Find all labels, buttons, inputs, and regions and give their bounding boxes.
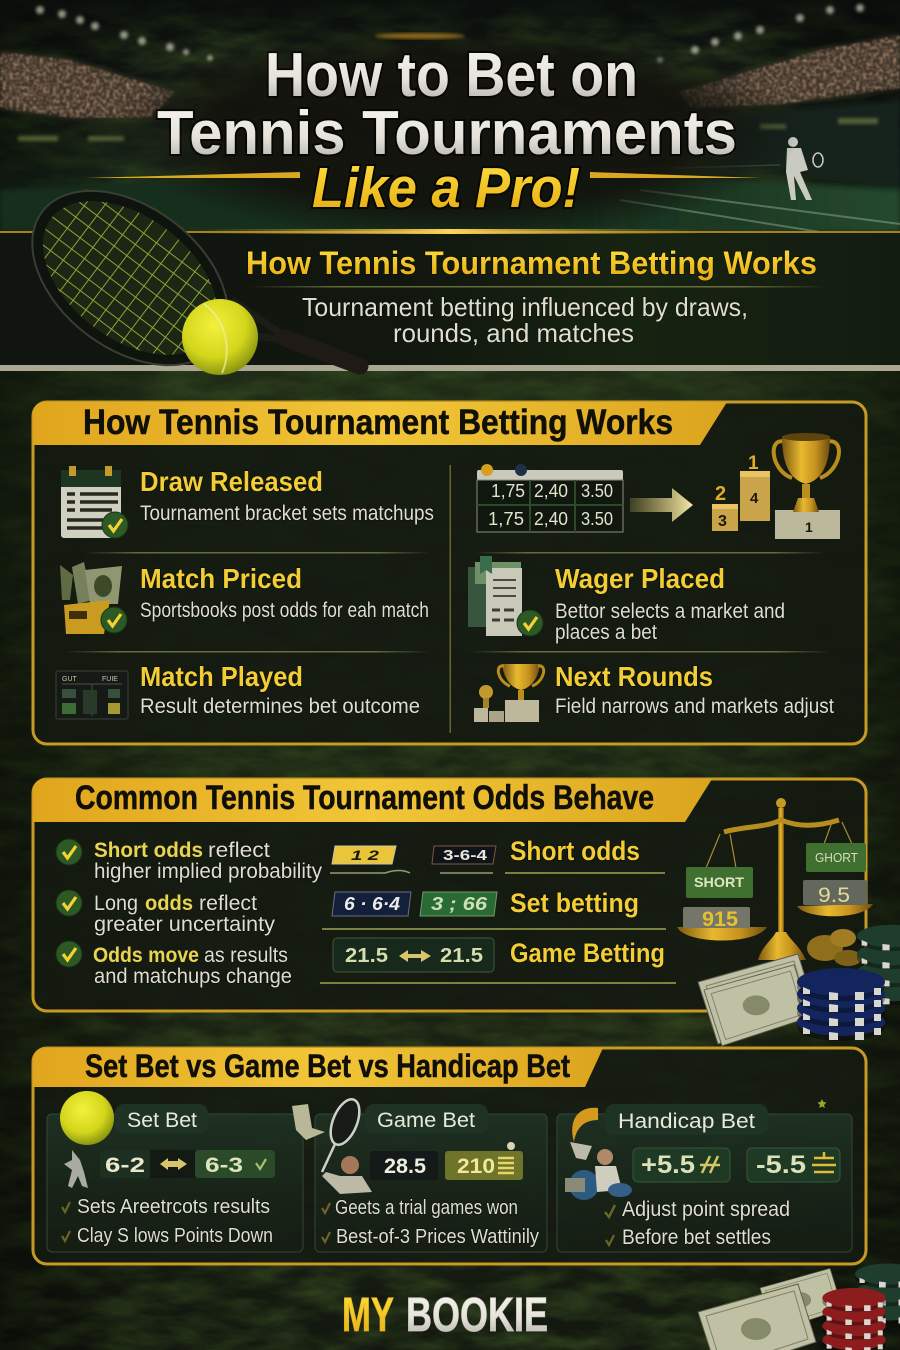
title: Like a Pro! <box>312 156 580 220</box>
panel: how betting works <box>33 402 866 744</box>
odds row: 210 <box>457 1155 495 1178</box>
title <box>157 41 737 220</box>
podium and trophy: 3 <box>718 513 727 530</box>
row: set betting: Set betting <box>510 888 639 918</box>
step: draw released: Draw Released <box>140 466 323 497</box>
icon: cash box <box>60 562 127 634</box>
step: wager placed: places a bet <box>555 621 657 644</box>
pill: handicap bet: Handicap Bet <box>618 1110 755 1133</box>
panel: bet comparison <box>33 1048 866 1264</box>
bullets <box>605 1198 790 1249</box>
logo: MY <box>342 1289 394 1342</box>
intro text: rounds, and matches <box>393 318 634 348</box>
point: long odds: Long <box>94 892 138 915</box>
pill: game bet: Game Bet <box>377 1109 475 1132</box>
intro heading: How Tennis Tournament Betting Works <box>246 245 817 281</box>
point: long odds <box>56 890 276 936</box>
odds table: 3.50 <box>581 509 613 529</box>
icon: betting slip <box>468 556 543 636</box>
step: match priced: Match Priced <box>140 563 302 594</box>
icon: balance scale: SHORT <box>694 874 744 890</box>
score row: 6-3 <box>205 1154 243 1177</box>
odds table <box>477 464 623 532</box>
point: short odds: reflect <box>208 839 270 862</box>
spread chips: -5.5 <box>756 1151 806 1179</box>
bullets <box>62 1196 273 1247</box>
point: odds move: and matchups change <box>94 965 292 988</box>
section heading: Set Bet vs Game Bet vs Handicap Bet <box>85 1048 570 1084</box>
icon: balance scale <box>677 798 873 966</box>
odds table: 2,40 <box>534 481 568 501</box>
bullets: Before bet settles <box>622 1226 771 1249</box>
point: long odds: reflect <box>199 892 257 915</box>
pill: handicap bet <box>605 1104 768 1135</box>
odds row <box>370 1142 523 1180</box>
step: wager placed: Bettor selects a market and <box>555 600 785 623</box>
step: wager placed: Wager Placed <box>555 563 725 594</box>
intro text: Tournament betting influenced by draws, <box>302 292 748 322</box>
podium and trophy: 1 <box>748 453 759 474</box>
point: odds move: as results <box>204 944 288 967</box>
icon: player figure <box>64 1150 88 1188</box>
spread chips <box>633 1148 840 1182</box>
distant player <box>786 137 823 200</box>
section heading: Common Tennis Tournament Odds Behave <box>75 779 654 817</box>
bullets: Adjust point spread <box>622 1198 790 1221</box>
row: short odds <box>330 836 665 874</box>
icon: cash and poker chips <box>698 925 900 1046</box>
icon: tennis ball <box>60 1091 114 1145</box>
row: set betting: 6 · 6·4 <box>344 894 400 914</box>
icon: bottom cash and chips <box>698 1264 900 1350</box>
section banner <box>33 779 712 822</box>
odds table: 3.50 <box>581 481 613 501</box>
icon: tennis ball <box>182 299 258 375</box>
spread chips: +5.5 <box>641 1151 695 1179</box>
odds table: 2,40 <box>534 509 568 529</box>
step: match played: Result determines bet outcome <box>140 695 420 718</box>
pill: game bet <box>365 1104 488 1134</box>
step: match priced <box>60 562 429 634</box>
pill: set bet <box>115 1104 208 1134</box>
left crowd <box>0 52 175 118</box>
icon: bracket calendar <box>61 466 128 538</box>
arrow <box>630 488 693 522</box>
title flourishes <box>85 172 762 178</box>
logo <box>342 1289 548 1342</box>
row: short odds: 3-6-4 <box>443 847 488 864</box>
point: short odds: higher implied probability <box>94 860 322 883</box>
row: game betting <box>320 938 676 984</box>
row: short odds: Short odds <box>510 836 640 866</box>
icon: star <box>818 1099 826 1108</box>
top gold glow <box>375 33 465 39</box>
right wall <box>730 100 900 192</box>
step: match priced: Sportsbooks post odds for eah match <box>140 599 429 622</box>
bullets: Geets a trial games won <box>335 1197 518 1219</box>
column divider <box>450 465 451 733</box>
step: draw released <box>61 466 434 538</box>
row: game betting: Game Betting <box>510 938 665 968</box>
row: set betting <box>322 888 666 930</box>
row: game betting: 21.5 <box>440 945 483 967</box>
pill: set bet: Set Bet <box>127 1109 197 1132</box>
court line <box>0 365 900 371</box>
point: short odds: Short odds <box>94 839 203 862</box>
step: next rounds: Field narrows and markets adjust <box>555 695 834 718</box>
logo: BOOKIE <box>406 1289 548 1342</box>
icon: gold arc arrow <box>572 1108 598 1142</box>
icon: trophy and podium <box>474 664 544 722</box>
icon: balance scale: 9.5 <box>818 884 850 907</box>
bullets <box>322 1197 539 1248</box>
point: odds move: Odds move <box>93 944 199 967</box>
row: short odds: 1 2 <box>351 847 379 863</box>
icon: balance scale: GHORT <box>815 850 858 865</box>
podium and trophy: 4 <box>750 490 759 507</box>
court <box>0 175 900 232</box>
step: match played: Match Played <box>140 661 303 692</box>
step: draw released: Tournament bracket sets matchups <box>140 502 434 525</box>
icon: racket and player <box>322 1095 372 1194</box>
intro band <box>0 229 900 365</box>
point: long odds: greater uncertainty <box>94 913 276 936</box>
wall signs <box>18 118 878 141</box>
row: set betting: 3 ; 66 <box>431 894 488 914</box>
title: How to Bet on <box>265 41 638 110</box>
podium and trophy: 1 <box>805 519 813 535</box>
step: wager placed <box>468 556 785 644</box>
bullets: Sets Areetrcots results <box>77 1196 270 1218</box>
intro text <box>302 292 748 348</box>
odds row: 28.5 <box>384 1155 426 1178</box>
icon: balance scale: 915 <box>702 908 738 931</box>
icon: paper slip <box>292 1104 325 1140</box>
podium and trophy <box>712 433 840 539</box>
bullets: Best-of-3 Prices Wattinily <box>336 1226 539 1248</box>
card: set bet <box>47 1091 303 1252</box>
odds table: 1,75 <box>491 481 525 501</box>
title: Tennis Tournaments <box>157 99 737 168</box>
row: game betting: 21.5 <box>345 945 388 967</box>
title backdrop <box>110 25 800 240</box>
icon: tennis racket <box>0 155 360 401</box>
card: game bet <box>292 1095 547 1252</box>
icon: scoreboard: GUT <box>62 676 78 683</box>
icon: scoreboard: FUIE <box>102 676 118 683</box>
step: next rounds <box>474 661 834 722</box>
odds table: 1,75 <box>488 509 524 529</box>
step: next rounds: Next Rounds <box>555 661 713 692</box>
score row <box>100 1150 275 1178</box>
point: short odds <box>56 839 322 883</box>
bullets: Clay S lows Points Down <box>77 1225 273 1247</box>
right crowd <box>680 35 900 108</box>
step: match played <box>56 661 420 719</box>
stadium lights <box>36 4 864 63</box>
stadium header scene <box>0 0 900 240</box>
point: odds move <box>56 941 292 988</box>
icon: scoreboard <box>56 671 128 719</box>
panel: odds behave <box>33 779 900 1046</box>
point: long odds: odds <box>145 892 193 915</box>
row dividers <box>65 552 830 652</box>
intro divider <box>250 286 828 288</box>
section banner <box>33 402 727 445</box>
icon: seated player <box>565 1142 632 1200</box>
podium and trophy: 2 <box>715 483 726 505</box>
card: handicap bet <box>557 1099 852 1252</box>
section heading: How Tennis Tournament Betting Works <box>83 403 673 442</box>
score row: 6-2 <box>105 1154 145 1177</box>
section banner <box>33 1048 603 1087</box>
